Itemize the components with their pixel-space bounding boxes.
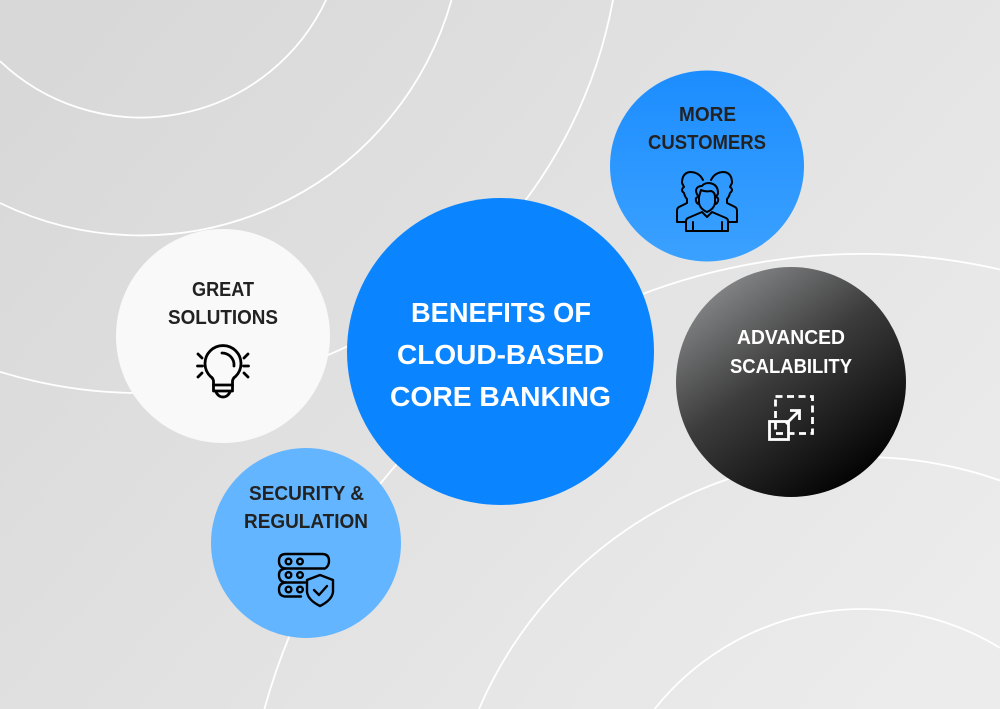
heading: advanced scalability: ADVANCED (737, 327, 845, 349)
heading: great solutions: GREAT (192, 279, 254, 301)
panel: more customers (610, 70, 804, 262)
heading: advanced scalability (730, 327, 853, 378)
icon: customers (677, 172, 737, 231)
heading: great solutions (168, 279, 278, 329)
heading: security and regulation: SECURITY & (249, 483, 364, 505)
heading: more customers: MORE (679, 104, 736, 126)
title: BENEFITS OF (411, 297, 591, 328)
title: CORE BANKING (390, 381, 611, 412)
icon: light bulb (198, 346, 248, 397)
heading: advanced scalability: SCALABILITY (730, 356, 853, 378)
panel: great solutions (116, 229, 330, 443)
heading: more customers (648, 104, 766, 154)
heading: security and regulation: REGULATION (244, 511, 368, 533)
panel: security and regulation (211, 448, 401, 638)
heading: great solutions: SOLUTIONS (168, 307, 278, 329)
title (390, 297, 611, 412)
heading: security and regulation (244, 483, 368, 533)
title: CLOUD-BASED (397, 339, 604, 370)
icon: server with shield (279, 554, 333, 606)
panel: advanced scalability (676, 267, 906, 497)
heading: more customers: CUSTOMERS (648, 132, 766, 154)
panel: central title circle (347, 198, 654, 505)
icon: scaling squares (770, 396, 812, 440)
